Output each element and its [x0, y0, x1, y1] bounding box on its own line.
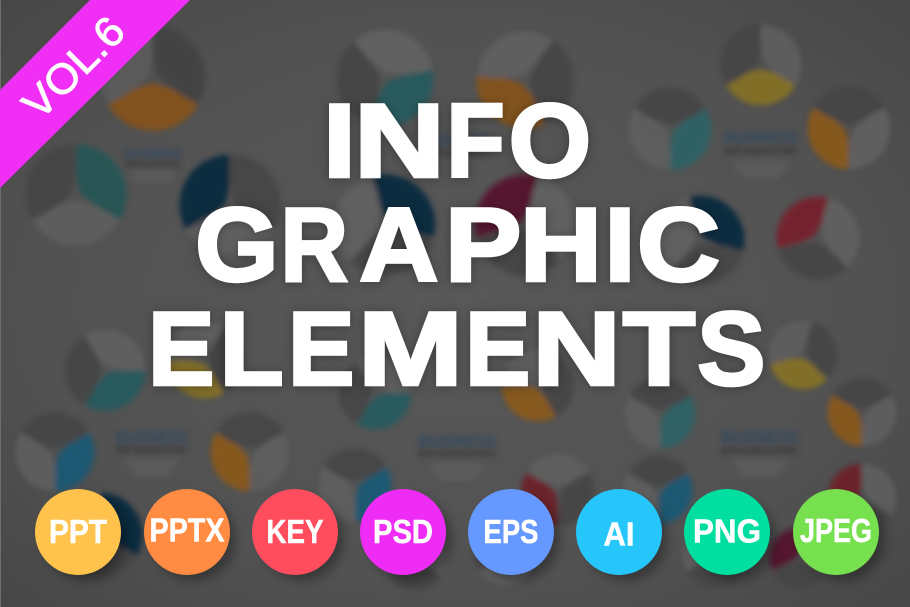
blurred caption top centre: [428, 132, 488, 158]
badge: PPT: [35, 489, 127, 581]
title line: ELEMENTS: E: [288, 290, 354, 406]
title line: GRAPHIC: I: [605, 186, 635, 302]
circle diagram: blue bottom centre: [293, 422, 410, 544]
badge: KEY: [252, 489, 344, 581]
badge: JPEG: [793, 489, 885, 581]
blurred caption lower right: BUSINESS: [721, 428, 799, 447]
title line: ELEMENTS: T: [623, 290, 695, 406]
title line: GRAPHIC: A: [360, 186, 438, 302]
circle diagram: grey behind PSD badge: [376, 523, 454, 590]
blurred caption lower centre: BUSINESS: [418, 432, 496, 451]
blurred caption lower left: BUSINESS: [116, 428, 188, 447]
badge: JPEG: JPEG: [800, 512, 872, 549]
blurred caption top right: [724, 128, 798, 177]
circle diagram: blue bottom right: [599, 430, 710, 546]
blurred caption lower right: [721, 428, 799, 476]
badge: PPTX: PPTX: [150, 512, 224, 548]
title line: GRAPHIC: R: [281, 186, 348, 302]
corner ribbon: [0, 0, 190, 188]
badge: PNG: [684, 489, 776, 581]
title line: ELEMENTS: S: [698, 290, 765, 406]
circle diagram: red bottom right: [810, 442, 910, 558]
badge: PPTX: [144, 489, 236, 581]
title line: GRAPHIC: P: [445, 186, 521, 302]
circle diagram: blue bottom left: [0, 384, 115, 516]
title line: INFO: I: [323, 82, 356, 198]
circle diagram: yellow top right: [709, 15, 813, 105]
circle diagram: yellow lower left: [143, 294, 272, 418]
left edge highlight: [0, 0, 1, 607]
blurred caption lower left: INFOGRAPHIC: [116, 445, 188, 456]
blurred caption lower centre: [418, 432, 496, 480]
blurred caption lower right: INFOGRAPHIC: [721, 446, 799, 457]
badge: EPS: [468, 489, 560, 581]
circle diagram: grey behind EPS badge: [466, 518, 544, 585]
badge: KEY: KEY: [266, 513, 324, 550]
blurred caption top right: BUSINESS: [724, 128, 798, 147]
circle diagram: grey behind PNG badge: [673, 515, 757, 587]
title line: INFO: N: [354, 82, 445, 198]
circle diagram: crimson behind JPEG badge: [753, 509, 853, 607]
title line: ELEMENTS: M: [358, 290, 463, 406]
blurred caption top right: INFOGRAPHIC: [724, 146, 798, 157]
circle diagram: navy right: [621, 168, 772, 319]
title line: INFO: F: [447, 82, 504, 198]
circle diagram: teal top centre: [298, 0, 464, 155]
blurred caption lower left: [116, 428, 188, 475]
blurred caption top left: BUSINESS: [124, 146, 182, 161]
circle diagram: yellow far right: [751, 302, 857, 400]
title line: GRAPHIC: H: [520, 186, 602, 302]
circle diagram: teal right: [599, 57, 733, 196]
circle diagram: teal lower left: [35, 301, 170, 431]
badge: PSD: [360, 489, 452, 581]
blurred caption top left: INFOGRAPHIC: [124, 159, 182, 169]
circle diagram: teal lower right: [599, 352, 713, 470]
blurred caption top left: [124, 146, 182, 181]
badge: EPS: EPS: [484, 513, 538, 550]
circle diagram: orange far right: [810, 352, 910, 468]
circle diagram: orange bottom left: [190, 384, 318, 516]
circle diagram: crimson bottom centre: [503, 427, 620, 549]
badge: AI: [576, 489, 668, 581]
circle diagram: red right: [751, 171, 892, 312]
title line: ELEMENTS: E: [465, 290, 530, 406]
circle diagram: teal 03: [0, 113, 152, 283]
title line: GRAPHIC: C: [637, 186, 720, 302]
blurred caption lower centre: INFOGRAPHIC: [418, 449, 496, 460]
circle diagram: orange top centre: [446, 0, 611, 156]
format badges: [35, 489, 885, 581]
circle diagram: orange right: [786, 56, 910, 195]
blurred caption top centre: INFOGRAPHIC: [428, 148, 488, 158]
title: [148, 82, 765, 406]
circle diagram: teal lower centre: [312, 331, 434, 448]
badge: PSD: PSD: [373, 513, 433, 550]
title line: ELEMENTS: E: [148, 290, 214, 406]
circle diagram: navy centre: [295, 143, 467, 315]
circle diagram: crimson centre: [443, 143, 615, 315]
circle diagram: orange 01: [85, 13, 221, 131]
blurred caption top centre: BUSINESS: [428, 132, 488, 149]
badge: PPT: PPT: [49, 513, 107, 550]
circle diagram: navy behind badges: [27, 466, 164, 607]
title line: INFO: O: [509, 82, 591, 198]
badge: AI: AI: [604, 516, 634, 552]
title line: GRAPHIC: G: [195, 186, 278, 302]
ribbon label: VOL.6: VOL.6: [13, 7, 134, 128]
title line: ELEMENTS: L: [220, 290, 284, 406]
title line: ELEMENTS: N: [533, 290, 620, 406]
circle diagram: orange lower centre: [479, 323, 601, 440]
badge: PNG: PNG: [693, 512, 761, 550]
circle diagram: navy 02: [154, 123, 317, 293]
